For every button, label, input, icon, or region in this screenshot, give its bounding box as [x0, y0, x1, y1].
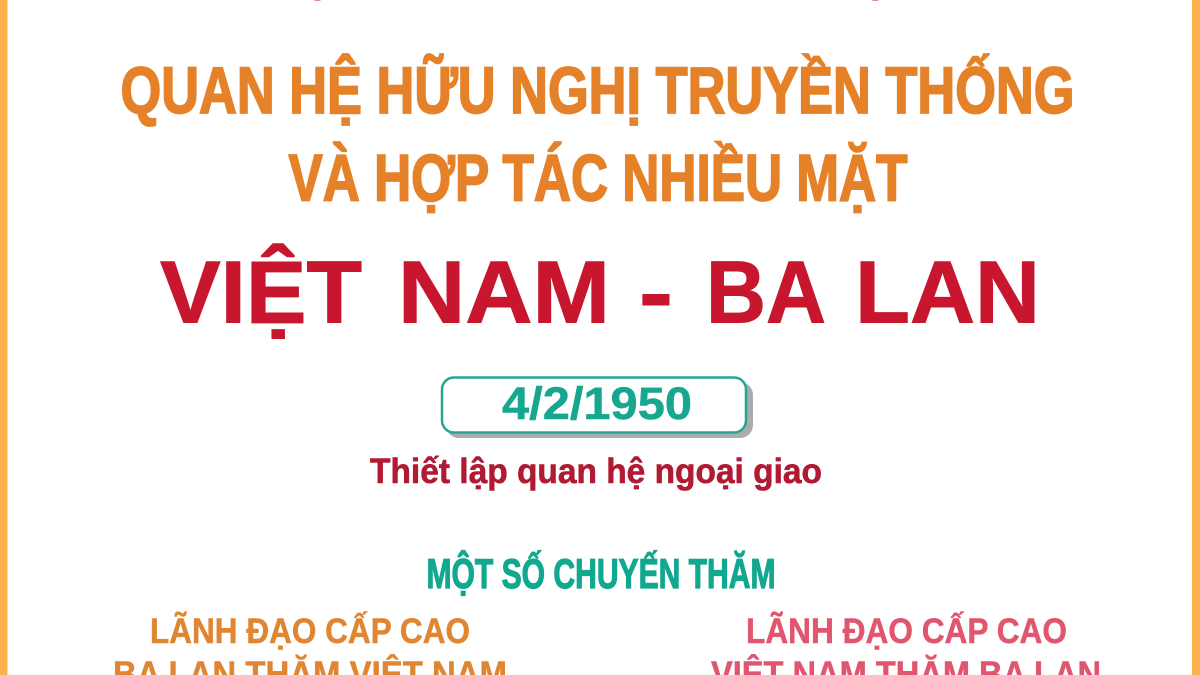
title: country names: LAN — [855, 242, 1040, 342]
section heading: visits: MỘT SỐ CHUYẾN THĂM — [426, 549, 776, 597]
right orange border — [1192, 0, 1200, 675]
title: country names: NAM — [398, 242, 610, 342]
date badge — [442, 378, 753, 438]
diplomatic relations caption: Thiết lập quan hệ ngoại giao — [370, 452, 822, 491]
column heading: Poland to Vietnam — [113, 611, 507, 675]
title: second line: VÀ HỢP TÁC NHIỀU MẶT — [288, 140, 908, 214]
badge frame — [442, 378, 746, 432]
title: country names — [160, 242, 1040, 342]
cropped top line parentheses — [306, 0, 887, 2]
badge shadow — [446, 382, 753, 438]
title: country names: BA — [706, 242, 826, 342]
column heading: Poland to Vietnam: LÃNH ĐẠO CẤP CAO — [150, 611, 470, 651]
column heading: Vietnam to Poland: LÃNH ĐẠO CẤP CAO — [746, 611, 1067, 651]
title: country names: - — [639, 242, 673, 342]
left orange border — [0, 0, 8, 675]
title: country names: VIỆT — [160, 242, 362, 342]
column heading: Vietnam to Poland — [711, 611, 1101, 675]
badge date: 4/2/1950 — [502, 378, 692, 429]
